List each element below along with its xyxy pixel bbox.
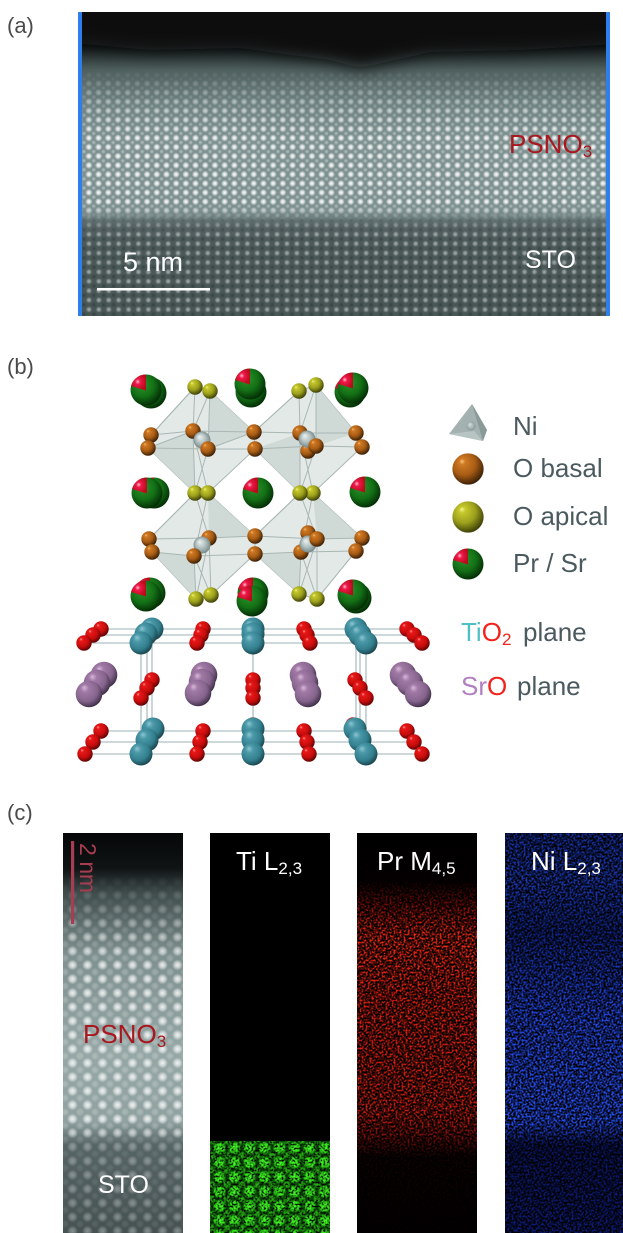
PSNO3 label: 3: [157, 1032, 166, 1051]
legend: [449, 404, 608, 701]
label: Ni: Ni: [513, 411, 538, 441]
panel: crystal structure: [76, 368, 431, 766]
O apical atoms: [187, 377, 325, 607]
Pr/Sr atoms, rear: [134, 376, 372, 614]
map title: 2,3: [577, 859, 601, 878]
blue Ni signal: [505, 833, 623, 1233]
STO label: STO: [98, 1171, 149, 1199]
scale label: 2 nm: [75, 843, 101, 893]
map title: Ni L: [531, 846, 577, 876]
scale bar: [97, 288, 210, 290]
map title: 2,3: [278, 859, 302, 878]
STO bonds: [84, 629, 422, 754]
O basal atoms, rear: [140, 423, 370, 562]
noise overlay: [210, 1141, 330, 1233]
octahedra: [148, 385, 362, 599]
Pr/Sr atoms, front: [130, 368, 380, 616]
label: SrO plane: plane: [517, 671, 581, 701]
PSNO3 label: 3: [583, 142, 592, 161]
red Pr signal: [357, 833, 477, 1233]
right blue edge: [606, 12, 610, 316]
icon: Ni pyramid: [449, 404, 487, 441]
scale label: 5 nm: [123, 247, 183, 277]
panel: Ni L2,3 map: [505, 833, 623, 1233]
icon: O apical sphere: [452, 501, 484, 533]
label: panel a: (a): [7, 13, 34, 38]
label: O apical: O apical: [513, 501, 608, 531]
STO bottom plane atoms: [77, 717, 430, 766]
noise overlay: [357, 833, 477, 1233]
O basal atoms, front: [186, 438, 325, 564]
label: O basal: O basal: [513, 453, 603, 483]
map title: Pr M: [377, 846, 432, 876]
green Ti signal: [210, 1141, 330, 1233]
label: TiO2 plane: TiO: [461, 617, 502, 647]
label: panel c: (c): [7, 800, 33, 825]
PSNO3 label: PSNO: [509, 129, 583, 159]
STO middle plane atoms: [76, 662, 431, 707]
PSNO3 label: PSNO: [83, 1019, 157, 1049]
map title: 4,5: [432, 859, 456, 878]
label: TiO2 plane: plane: [523, 617, 587, 647]
noise overlay: [505, 833, 623, 1233]
scale bar: [71, 841, 74, 924]
microscopy image: [63, 833, 183, 1233]
map title: Ti L: [236, 846, 278, 876]
icon: O basal sphere: [452, 453, 484, 485]
left blue edge: [78, 12, 82, 316]
panel: STEM image of PSNO3 on STO: [78, 12, 610, 316]
label: Pr / Sr: Pr / Sr: [513, 548, 587, 578]
icon: Pr/Sr sphere: [452, 548, 484, 580]
label: panel b: (b): [7, 354, 34, 379]
panel: Pr M4,5 map: [357, 833, 477, 1233]
panel: Ti L2,3 map: [210, 833, 330, 1233]
label: TiO2 plane: 2: [502, 630, 511, 649]
microscopy image: [82, 12, 606, 316]
STO label: STO: [525, 246, 576, 274]
black background: [210, 833, 330, 1233]
panel: STEM close-up: [63, 833, 183, 1233]
Ni atoms: [194, 430, 316, 554]
label: SrO plane: SrO: [461, 671, 507, 701]
STO top plane atoms: [76, 618, 430, 654]
Ti lattice: [210, 1141, 330, 1233]
